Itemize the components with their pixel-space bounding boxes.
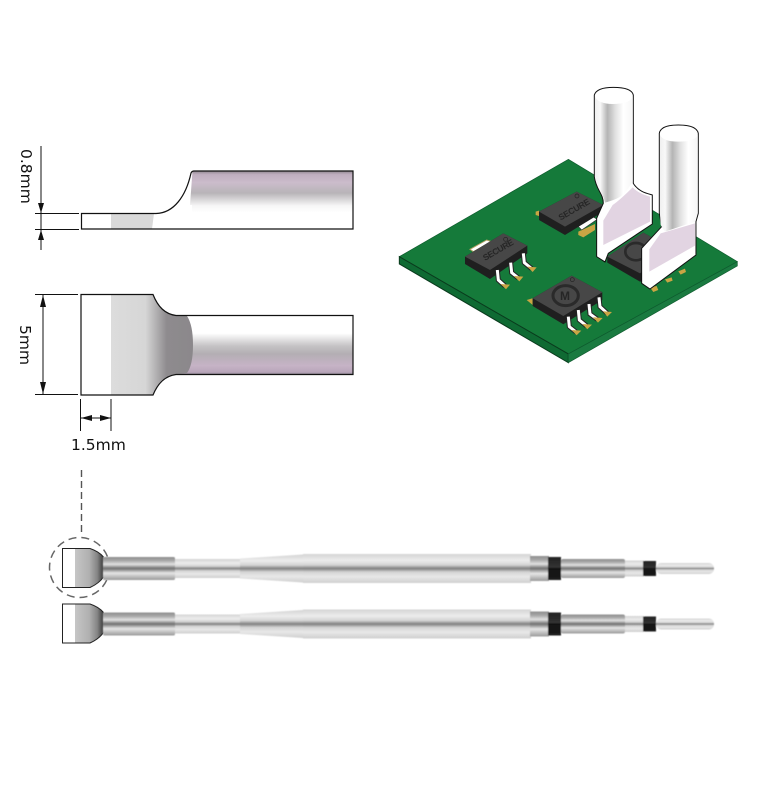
top view of tip: [81, 294, 353, 395]
side view outline: [82, 171, 353, 229]
solder pads under right tip: [650, 269, 686, 292]
dashed leader line: [80, 470, 82, 534]
full tip: lower: [62, 604, 714, 643]
dimension: 0.8mm: [17, 146, 79, 250]
label 1.5mm: 1.5mm: [71, 436, 126, 454]
top view shank: [176, 316, 353, 374]
dimension: 5mm: [16, 294, 78, 394]
full tip: upper: [62, 548, 714, 588]
top view blade head: [111, 294, 193, 395]
side view grey blade facet: [111, 214, 154, 229]
chip: logo front with four leads: [527, 276, 612, 335]
dimension: 1.5mm: [71, 399, 126, 454]
side view of tip: [82, 171, 353, 229]
chip logo: M: [560, 289, 570, 303]
PCB illustration with two soldering tips: [399, 87, 737, 363]
dashed detail circle: [50, 538, 110, 598]
label 5mm: 5mm: [16, 325, 34, 365]
chip behind tips: [607, 233, 657, 282]
side view shank shading: [157, 171, 353, 229]
top view outline: [81, 294, 353, 395]
chip: SECURE left with three leads: SECURE: [481, 237, 516, 263]
chip: SECURE top: [536, 192, 603, 237]
soldering tip: right: [642, 125, 698, 289]
soldering tip: left: [594, 87, 652, 262]
PCB board: [399, 159, 737, 363]
label 0.8mm: 0.8mm: [17, 149, 35, 204]
chip: SECURE left with three leads: [465, 233, 537, 289]
chip: SECURE top: SECURE: [557, 196, 592, 222]
